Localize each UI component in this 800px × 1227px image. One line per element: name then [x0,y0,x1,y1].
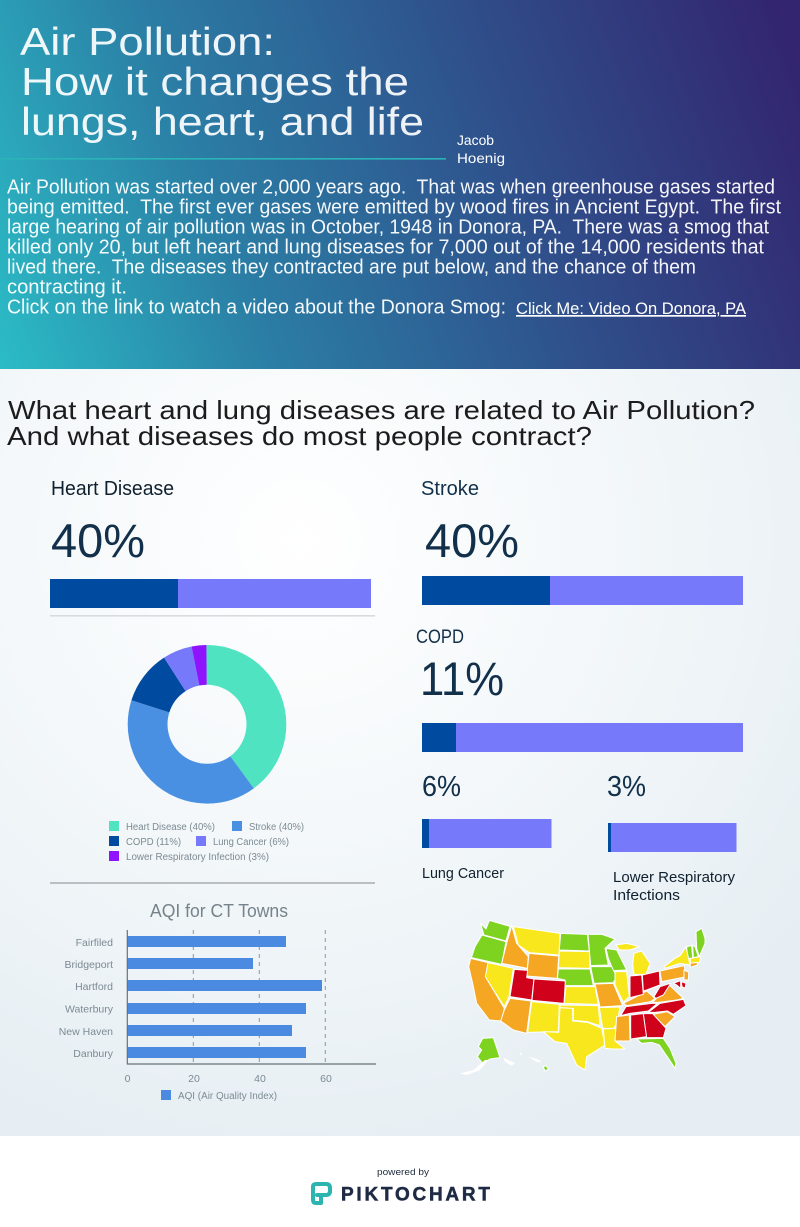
stat: COPD: 11% [420,652,504,705]
stat: heart disease [50,478,371,608]
donut legend: Heart Disease (40%) [126,822,215,833]
stat: COPD: COPD [416,627,464,648]
title: lungs, heart, and life [21,101,424,144]
bar chart: AQI for CT towns: 60 [320,1073,332,1085]
donut legend: COPD (11%) [126,837,181,848]
stat: lower respiratory infections [607,771,736,904]
stat: lower respiratory infections: Infections [613,887,680,904]
stat: lower respiratory infections: 3% [607,771,646,803]
section heading [7,395,755,451]
donut legend: Stroke (40%) [249,822,304,833]
footer: powered by Piktochart: PIKTOCHART [341,1184,490,1206]
intro text [7,176,781,318]
panel: header [0,0,800,369]
bar chart: AQI for CT towns: New Haven [59,1026,113,1038]
stat: lung cancer: Lung Cancer [422,865,504,882]
footer: powered by Piktochart [313,1167,490,1206]
title [20,21,424,144]
intro text: contracting it. [7,276,127,298]
title: Air Pollution: [20,21,275,64]
video link: Click Me: Video On Donora, PA [516,299,747,318]
intro text: lived there. The diseases they contracted are put below, and the chance of them [7,256,696,278]
bar chart: AQI for CT towns: Waterbury [65,1004,114,1016]
author: Hoenig [457,150,505,166]
author: Jacob [457,132,494,148]
stat: COPD [416,627,743,752]
bar chart: AQI for CT towns: 40 [254,1073,266,1085]
bar chart: AQI for CT towns: Bridgeport [65,959,113,971]
bar chart: AQI for CT towns: 0 [125,1073,131,1085]
stat: heart disease: 40% [51,514,145,567]
title: How it changes the [21,61,409,104]
donut legend: Lower Respiratory Infection (3%) [126,852,269,863]
panel: diseases [0,369,800,1136]
stat: lung cancer: 6% [422,771,461,803]
intro text: large hearing of air pollution was in October, 1948 in Donora, PA. There was a smog that [7,216,769,238]
donut legend [109,821,304,863]
stat: lower respiratory infections: Lower Respiratory [613,869,735,886]
intro text: being emitted. The first ever gases were emitted by wood fires in Ancient Egypt. The first [7,196,781,218]
bar chart: AQI for CT towns: Danbury [73,1048,114,1060]
bar chart: AQI for CT towns [59,901,376,1102]
author [457,132,505,166]
bar chart: AQI for CT towns: 20 [188,1073,200,1085]
stat: stroke: 40% [425,514,519,567]
stat: lung cancer [422,771,552,882]
intro text: Click on the link to watch a video about the Donora Smog: [7,296,506,318]
bar chart: AQI for CT towns: AQI (Air Quality Index) [178,1091,277,1102]
donut legend: Lung Cancer (6%) [213,837,289,848]
section heading: What heart and lung diseases are related to Air Pollution? [8,395,755,425]
bar chart: AQI for CT towns: AQI for CT Towns [150,901,288,921]
icon: Piktochart logo [313,1184,330,1203]
bar chart: AQI for CT towns: Fairfiled [76,937,113,949]
US air quality map [460,920,705,1075]
donut chart [148,665,266,784]
stat: stroke [421,478,743,605]
stat: heart disease: Heart Disease [51,478,174,500]
stat: stroke: Stroke [421,478,479,500]
section heading: And what diseases do most people contract? [7,421,592,451]
intro text: Air Pollution was started over 2,000 years ago. That was when greenhouse gases started [7,176,775,198]
bar chart: AQI for CT towns: Hartford [75,981,113,993]
intro text: killed only 20, but left heart and lung diseases for 7,000 out of the 14,000 residents that [7,236,764,258]
footer: powered by Piktochart: powered by [377,1167,429,1178]
